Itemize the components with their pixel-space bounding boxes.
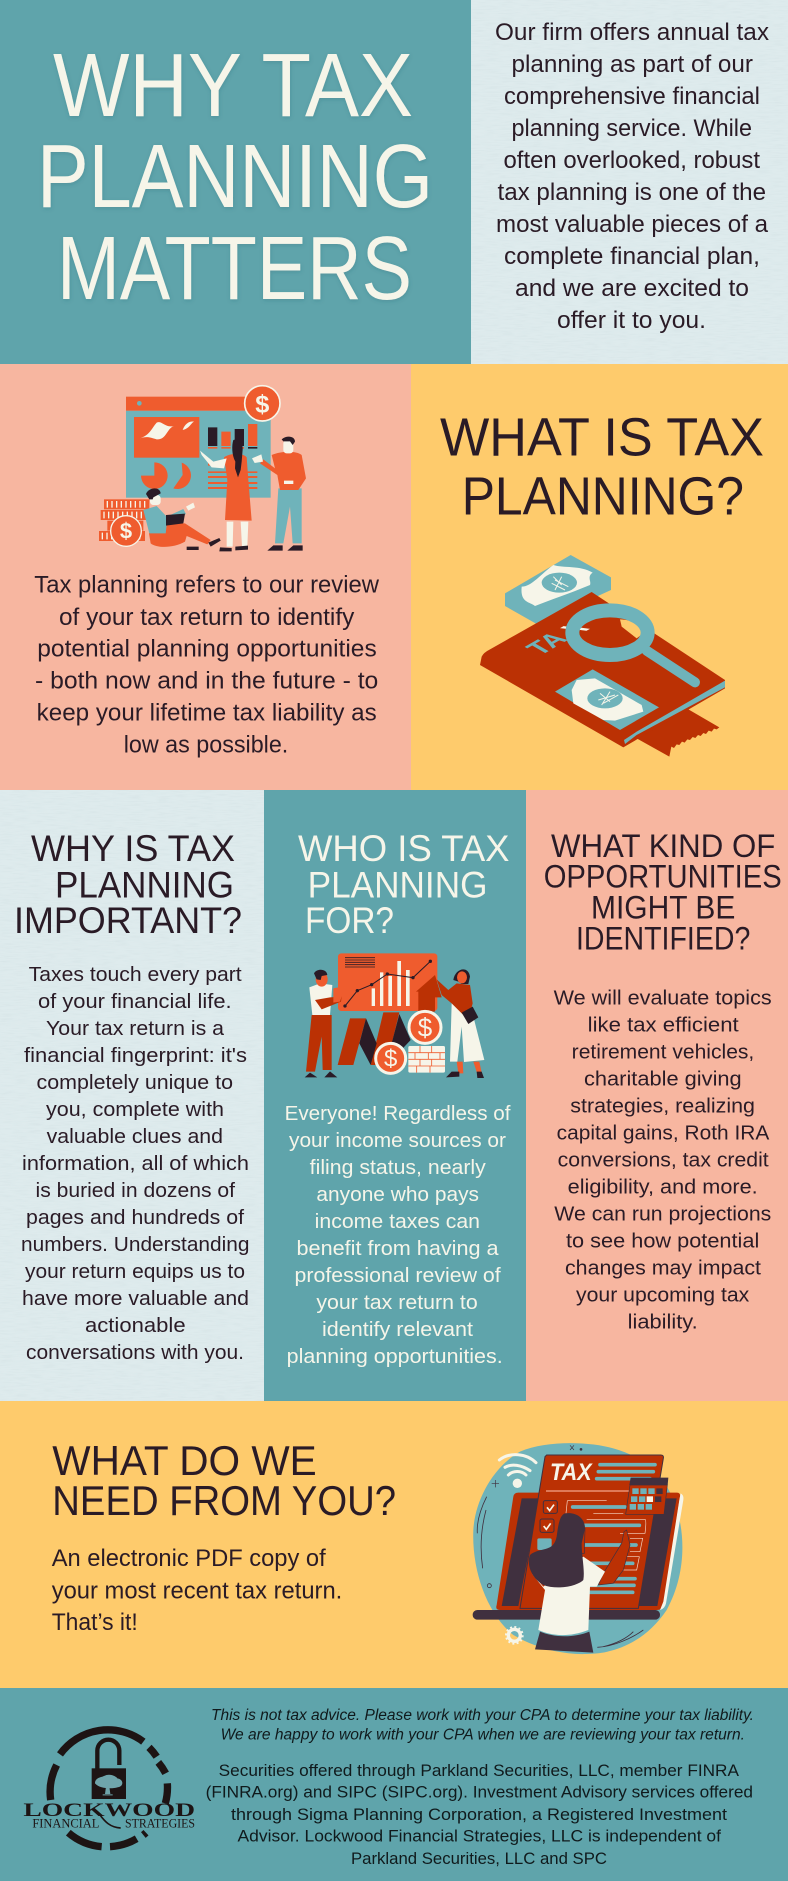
panel: definition [0,364,411,790]
panel: what is tax planning [411,364,788,790]
intro text: offer it to you. [557,307,706,334]
disclaimer: We are happy to work with your CPA when we are reviewing your tax return. [221,1726,745,1743]
heading: NEED FROM YOU? [52,1477,396,1524]
definition text: low as possible. [124,732,288,759]
heading: WHO IS TAX [298,828,510,869]
illustration: team presenting at dashboard: $ [120,519,132,544]
heading: WHAT KIND OF [551,828,775,864]
intro text: planning service. While [512,115,752,142]
illustration: woman working on tax form [473,1443,683,1654]
definition text: of your tax return to identify [59,604,354,631]
heading [14,828,242,941]
body text: information, all of which [22,1152,249,1175]
illustration: team presenting at dashboard [99,386,306,551]
securities notice: Parkland Securities, LLC and SPC [351,1849,607,1868]
panel: intro [471,0,788,364]
body text: income taxes can [315,1210,480,1233]
heading: PLANNING? [462,467,744,527]
body text: of your financial life. [38,990,232,1013]
body text: actionable [85,1314,186,1337]
body text: to see how potential [566,1229,759,1252]
intro text [495,19,769,334]
illustration: tax book and magnifier [480,555,725,757]
heading [440,407,764,527]
body text: changes may impact [565,1256,761,1279]
securities notice: (FINRA.org) and SIPC (SIPC.org). Investment Advisory services offered [206,1783,753,1802]
body text: conversions, tax credit [558,1148,769,1171]
title: WHY TAX [53,36,413,136]
illustration: tax book and magnifier: X [554,616,596,640]
body text: professional review of [294,1264,501,1287]
body text: your most recent tax return. [52,1577,342,1604]
heading: WHAT DO WE [52,1437,317,1484]
panel: footer [0,1688,788,1881]
body text: retirement vehicles, [572,1040,754,1063]
heading [544,828,782,957]
intro text: comprehensive financial [504,83,760,110]
body text [21,963,250,1364]
title [37,36,433,319]
logo: Lockwood Financial Strategies: STRATEGIES [125,1816,195,1830]
body text: financial fingerprint: it's [24,1044,247,1067]
heading: FOR? [305,900,394,941]
body text: Taxes touch every part [29,963,242,986]
body text: you, complete with [46,1098,224,1121]
illustration: advisors with growth chart: $ [418,1013,433,1043]
illustration: tax book and magnifier: TA [519,628,574,659]
panel: opportunities [526,790,788,1401]
securities notice [206,1761,753,1868]
body text: Your tax return is a [46,1017,225,1040]
body text [52,1545,342,1636]
heading: WHY IS TAX [31,828,235,869]
body text: your upcoming tax [576,1283,750,1306]
disclaimer: This is not tax advice. Please work with your CPA to determine your tax liability. [211,1707,754,1724]
heading: IMPORTANT? [14,900,242,941]
body text: eligibility, and more. [568,1175,758,1198]
body text: strategies, realizing [570,1094,755,1117]
heading [298,828,510,941]
body text: your tax return to [316,1291,478,1314]
securities notice: through Sigma Planning Corporation, a Registered Investment [231,1805,727,1824]
body text: valuable clues and [47,1125,223,1148]
body text: pages and hundreds of [26,1206,244,1229]
heading: PLANNING [55,864,234,906]
heading: WHAT IS TAX [440,407,764,467]
intro text: tax planning is one of the [498,179,766,206]
title: PLANNING [37,127,433,227]
disclaimer [211,1707,754,1743]
intro text: complete financial plan, [504,243,760,270]
body text: We will evaluate topics [554,986,772,1009]
body text: completely unique to [36,1071,233,1094]
illustration: advisors with growth chart: $ [384,1046,397,1073]
definition text: Tax planning refers to our review [34,572,380,599]
intro text: often overlooked, robust [504,147,760,174]
body text: planning opportunities. [287,1345,503,1368]
body text: have more valuable and [22,1287,249,1310]
body text: capital gains, Roth IRA [557,1121,770,1144]
intro text: and we are excited to [515,275,749,302]
body text: An electronic PDF copy of [52,1545,326,1572]
body text: liability. [628,1310,698,1333]
body text: your income sources or [289,1129,506,1152]
body text: like tax efficient [588,1013,739,1036]
body text: We can run projections [554,1202,771,1225]
definition text: - both now and in the future - to [35,668,378,695]
securities notice: Securities offered through Parkland Securities, LLC, member FINRA [219,1761,740,1780]
panel: title [0,0,471,364]
definition text: potential planning opportunities [37,636,377,663]
securities notice: Advisor. Lockwood Financial Strategies, LLC is independent of [238,1827,721,1846]
definition text: keep your lifetime tax liability as [37,700,377,727]
body text: anyone who pays [316,1183,479,1206]
heading: MIGHT BE [591,890,735,926]
body text [554,986,772,1333]
intro text: most valuable pieces of a [496,211,769,238]
body text: filing status, nearly [310,1156,487,1179]
body text: Everyone! Regardless of [285,1102,511,1125]
intro text: Our firm offers annual tax [495,19,769,46]
logo: Lockwood Financial Strategies: LOCKWOOD [23,1800,195,1821]
illustration: advisors with growth chart [305,953,484,1078]
body text: is buried in dozens of [36,1179,235,1202]
panel: what do we need [0,1401,788,1688]
illustration: team presenting at dashboard: $ [255,390,269,418]
logo: Lockwood Financial Strategies [23,1730,195,1847]
logo: Lockwood Financial Strategies: FINANCIAL [32,1816,99,1830]
body text [285,1102,511,1368]
body text: conversations with you. [26,1341,244,1364]
panel: who is tax planning for [264,790,526,1401]
body text: That’s it! [52,1609,138,1636]
illustration: woman working on tax form: TAX [550,1459,593,1486]
definition text [34,572,380,759]
body text: identify relevant [322,1318,473,1341]
body text: numbers. Understanding [21,1233,250,1256]
body text: charitable giving [584,1067,742,1090]
body text: your return equips us to [25,1260,245,1283]
heading: PLANNING [308,864,488,906]
heading [52,1437,396,1524]
title: MATTERS [57,219,412,319]
panel: why is tax planning important [0,790,264,1401]
body text: benefit from having a [296,1237,499,1260]
heading: IDENTIFIED? [576,921,750,957]
intro text: planning as part of our [512,51,753,78]
